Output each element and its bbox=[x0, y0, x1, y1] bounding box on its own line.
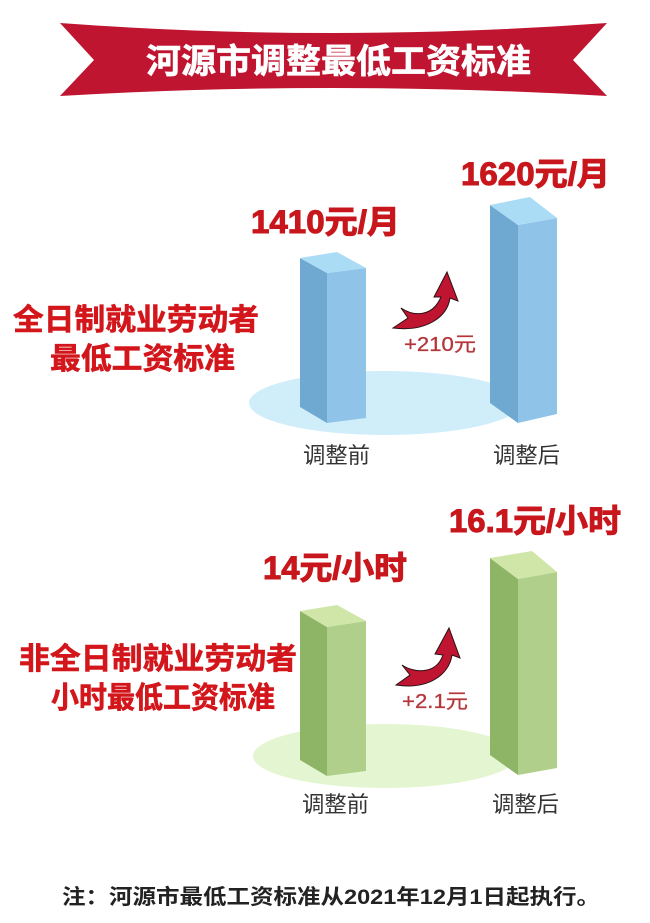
arrow: increase bbox=[396, 628, 460, 686]
bar: after adjustment bbox=[490, 551, 557, 775]
bar: before adjustment bbox=[300, 605, 366, 776]
chart base ellipse bbox=[249, 371, 521, 435]
heading: full-time workers: 全日制就业劳动者 bbox=[13, 304, 259, 337]
value: after: 16.1元/小时 bbox=[449, 503, 621, 539]
label: before: 调整前 bbox=[302, 792, 369, 817]
arrow: increase bbox=[393, 272, 458, 329]
title: 河源市调整最低工资标准 bbox=[146, 43, 531, 81]
value: before: 14元/小时 bbox=[263, 550, 407, 586]
bar: before adjustment bbox=[300, 252, 366, 423]
title banner bbox=[60, 23, 607, 96]
heading: part-time workers bbox=[19, 643, 297, 715]
panel: part-time minimum wage bbox=[19, 503, 621, 817]
label: after: 调整后 bbox=[492, 792, 559, 817]
chart base ellipse bbox=[253, 724, 517, 788]
footnote: 注：河源市最低工资标准从2021年12月1日起执行。 bbox=[62, 885, 600, 909]
heading: part-time workers: 非全日制就业劳动者 bbox=[19, 643, 297, 676]
heading: full-time workers: 最低工资标准 bbox=[50, 343, 235, 376]
label: after: 调整后 bbox=[493, 443, 560, 468]
label: before: 调整前 bbox=[303, 443, 370, 468]
heading: part-time workers: 小时最低工资标准 bbox=[51, 682, 275, 715]
heading: full-time workers bbox=[13, 304, 259, 376]
bar: after adjustment bbox=[490, 197, 557, 423]
value: before: 1410元/月 bbox=[251, 204, 400, 240]
panel: full-time minimum wage bbox=[13, 156, 610, 468]
value: after: 1620元/月 bbox=[461, 156, 610, 192]
increase label: +210元 bbox=[404, 334, 476, 356]
increase label: +2.1元 bbox=[402, 691, 468, 713]
banner ribbon bbox=[60, 23, 607, 96]
